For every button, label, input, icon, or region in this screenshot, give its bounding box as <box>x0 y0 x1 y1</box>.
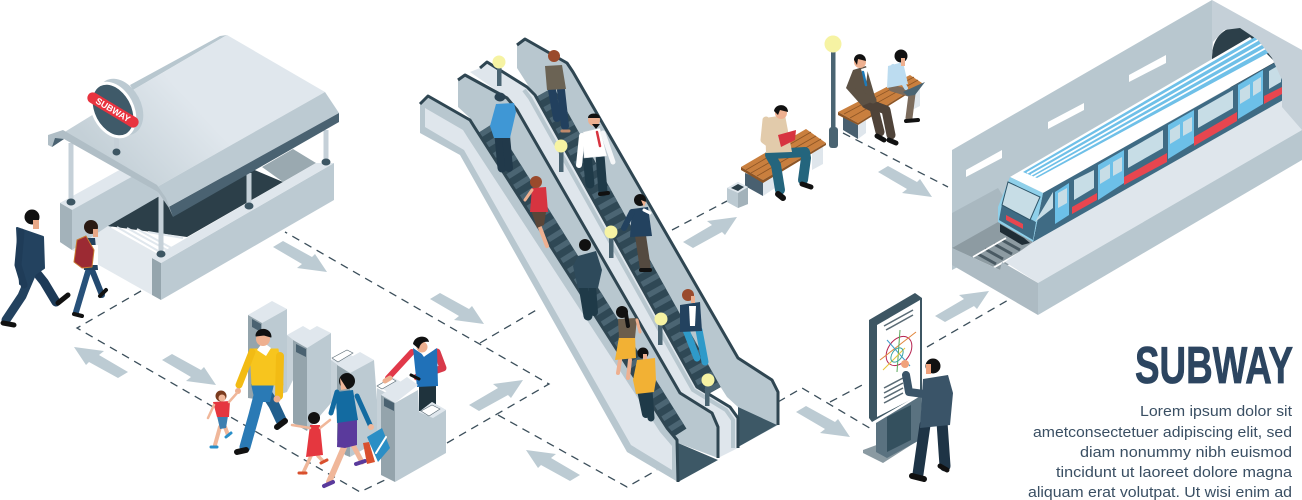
turnstile three <box>337 352 407 457</box>
person: boy in red shirt <box>208 390 237 447</box>
entrance base <box>60 149 334 300</box>
dashed route lines <box>77 133 1010 492</box>
rear bench legs <box>843 84 920 139</box>
turnstile four <box>381 377 446 482</box>
person: clerk at gate <box>385 337 443 411</box>
panel: escalators <box>420 39 778 482</box>
turnstile one <box>248 301 320 400</box>
panel: waiting area rear bench <box>838 75 922 139</box>
person: woman in red top <box>525 176 548 246</box>
front escalator end <box>678 443 718 482</box>
rear escalator end <box>738 407 777 447</box>
person: man in orange top <box>633 348 656 418</box>
entrance roof <box>48 35 339 217</box>
person: woman in blue jeans <box>680 289 705 362</box>
panel: information kiosk <box>863 293 922 463</box>
description text: diam nonummy nibh euismod <box>1080 444 1292 461</box>
rear escalator steps <box>545 92 712 392</box>
person: woman with laptop <box>887 50 925 121</box>
lamps on escalators <box>492 56 714 406</box>
subway train <box>998 37 1283 245</box>
front right handrail <box>458 75 718 458</box>
person: student with backpack <box>74 220 106 316</box>
tunnel arch <box>1212 27 1283 90</box>
entrance posts <box>66 130 330 258</box>
track bed <box>952 222 1040 270</box>
panel: train tunnel <box>952 0 1302 315</box>
person: man at kiosk <box>901 358 953 479</box>
subway sign <box>80 71 153 156</box>
lamp post <box>824 36 842 148</box>
panel: subway entrance <box>48 35 339 300</box>
subway sign: SUBWAY <box>94 96 132 124</box>
route arrows <box>74 166 989 481</box>
description text: tincidunt ut laoreet dolore magna <box>1056 464 1293 481</box>
tunnel back wall <box>952 0 1283 270</box>
kiosk post <box>876 395 922 458</box>
person: man in suit on phone <box>573 239 602 316</box>
turnstile two <box>293 326 360 431</box>
kiosk screen <box>869 293 922 422</box>
front escalator steps <box>486 128 678 434</box>
person: man in brown suit <box>846 54 896 143</box>
person: man in blue shirt <box>490 92 516 168</box>
description text <box>1028 403 1293 500</box>
description text: ametconsectetuer adipiscing elit, sed <box>1033 424 1292 441</box>
front outer balustrade <box>420 96 678 482</box>
person: man in white shirt <box>579 114 613 194</box>
bench seat <box>741 129 826 183</box>
description text: Lorem ipsum dolor sit <box>1140 403 1293 420</box>
panel: turnstiles <box>248 301 407 457</box>
centre divider <box>470 62 738 458</box>
icon: trash bin <box>727 182 748 208</box>
person: woman with bags <box>324 373 390 486</box>
rear escalator side panel <box>517 39 778 447</box>
person: woman in yellow skirt <box>615 306 640 378</box>
kiosk base <box>863 430 919 463</box>
bench legs <box>745 143 823 196</box>
tunnel lights <box>966 55 1166 177</box>
person: girl in red dress <box>292 412 330 473</box>
front escalator side panel <box>458 75 718 458</box>
panel: waiting area front bench <box>741 129 826 196</box>
person: man reading book <box>764 105 811 198</box>
person: man in yellow sweater <box>235 329 285 452</box>
person: escalator woman brown top <box>545 50 569 131</box>
tunnel right wall <box>1212 0 1302 130</box>
platform <box>952 100 1302 315</box>
person: man in suit walking <box>3 210 68 325</box>
rear right handrail <box>517 39 778 425</box>
rear bench seat <box>838 75 922 125</box>
person: man in sunglasses <box>624 194 652 270</box>
subway map <box>880 330 917 372</box>
tunnel wall lower band <box>952 188 1033 248</box>
